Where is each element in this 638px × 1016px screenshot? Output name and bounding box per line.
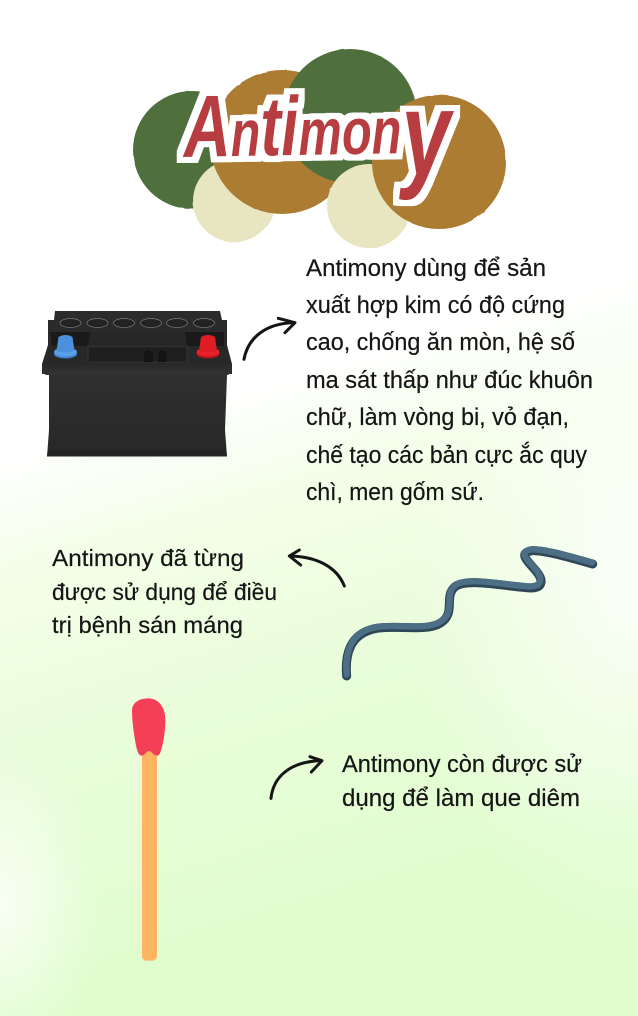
text block: matches: dụng để làm que diêm xyxy=(342,785,580,812)
text block: matches xyxy=(342,751,582,812)
battery lid xyxy=(42,311,232,374)
title badge xyxy=(133,49,506,248)
battery body xyxy=(47,375,227,456)
text block: alloys: Antimony dùng để sản xyxy=(306,255,546,282)
title: y xyxy=(396,66,457,201)
text block: alloys xyxy=(306,255,593,506)
match head xyxy=(132,698,165,756)
text block: alloys: xuất hợp kim có độ cứng xyxy=(306,292,565,319)
terminal recesses xyxy=(50,332,224,346)
centre plate xyxy=(88,332,187,362)
text block: medical use: Antimony đã từng xyxy=(52,545,244,571)
title xyxy=(181,66,457,205)
icon: schistosome worm xyxy=(346,549,593,676)
text block: alloys: chữ, làm vòng bi, vỏ đạn, xyxy=(306,404,569,431)
text block: medical use xyxy=(52,545,277,638)
cell caps xyxy=(60,318,214,328)
text block: matches: Antimony còn được sử xyxy=(342,751,582,778)
title: Antimon xyxy=(183,78,402,176)
text block: alloys: ma sát thấp như đúc khuôn xyxy=(306,367,593,394)
arrow: match to text xyxy=(271,757,322,798)
icon: car battery xyxy=(42,311,232,456)
overlapping paint circles xyxy=(133,49,506,248)
red terminal xyxy=(196,335,220,358)
icon: matchstick xyxy=(132,698,165,961)
match stick xyxy=(142,747,157,961)
blue terminal xyxy=(54,335,77,358)
shoulder band xyxy=(42,364,232,375)
text block: alloys: chì, men gốm sứ. xyxy=(306,479,484,506)
text block: medical use: trị bệnh sán máng xyxy=(52,612,243,638)
arrow: battery to text xyxy=(244,318,295,359)
arrow: worm to text xyxy=(289,550,344,586)
text block: medical use: được sử dụng để điều xyxy=(52,579,277,605)
text block: alloys: chế tạo các bản cực ắc quy xyxy=(306,442,587,469)
text block: alloys: cao, chống ăn mòn, hệ số xyxy=(306,329,575,356)
